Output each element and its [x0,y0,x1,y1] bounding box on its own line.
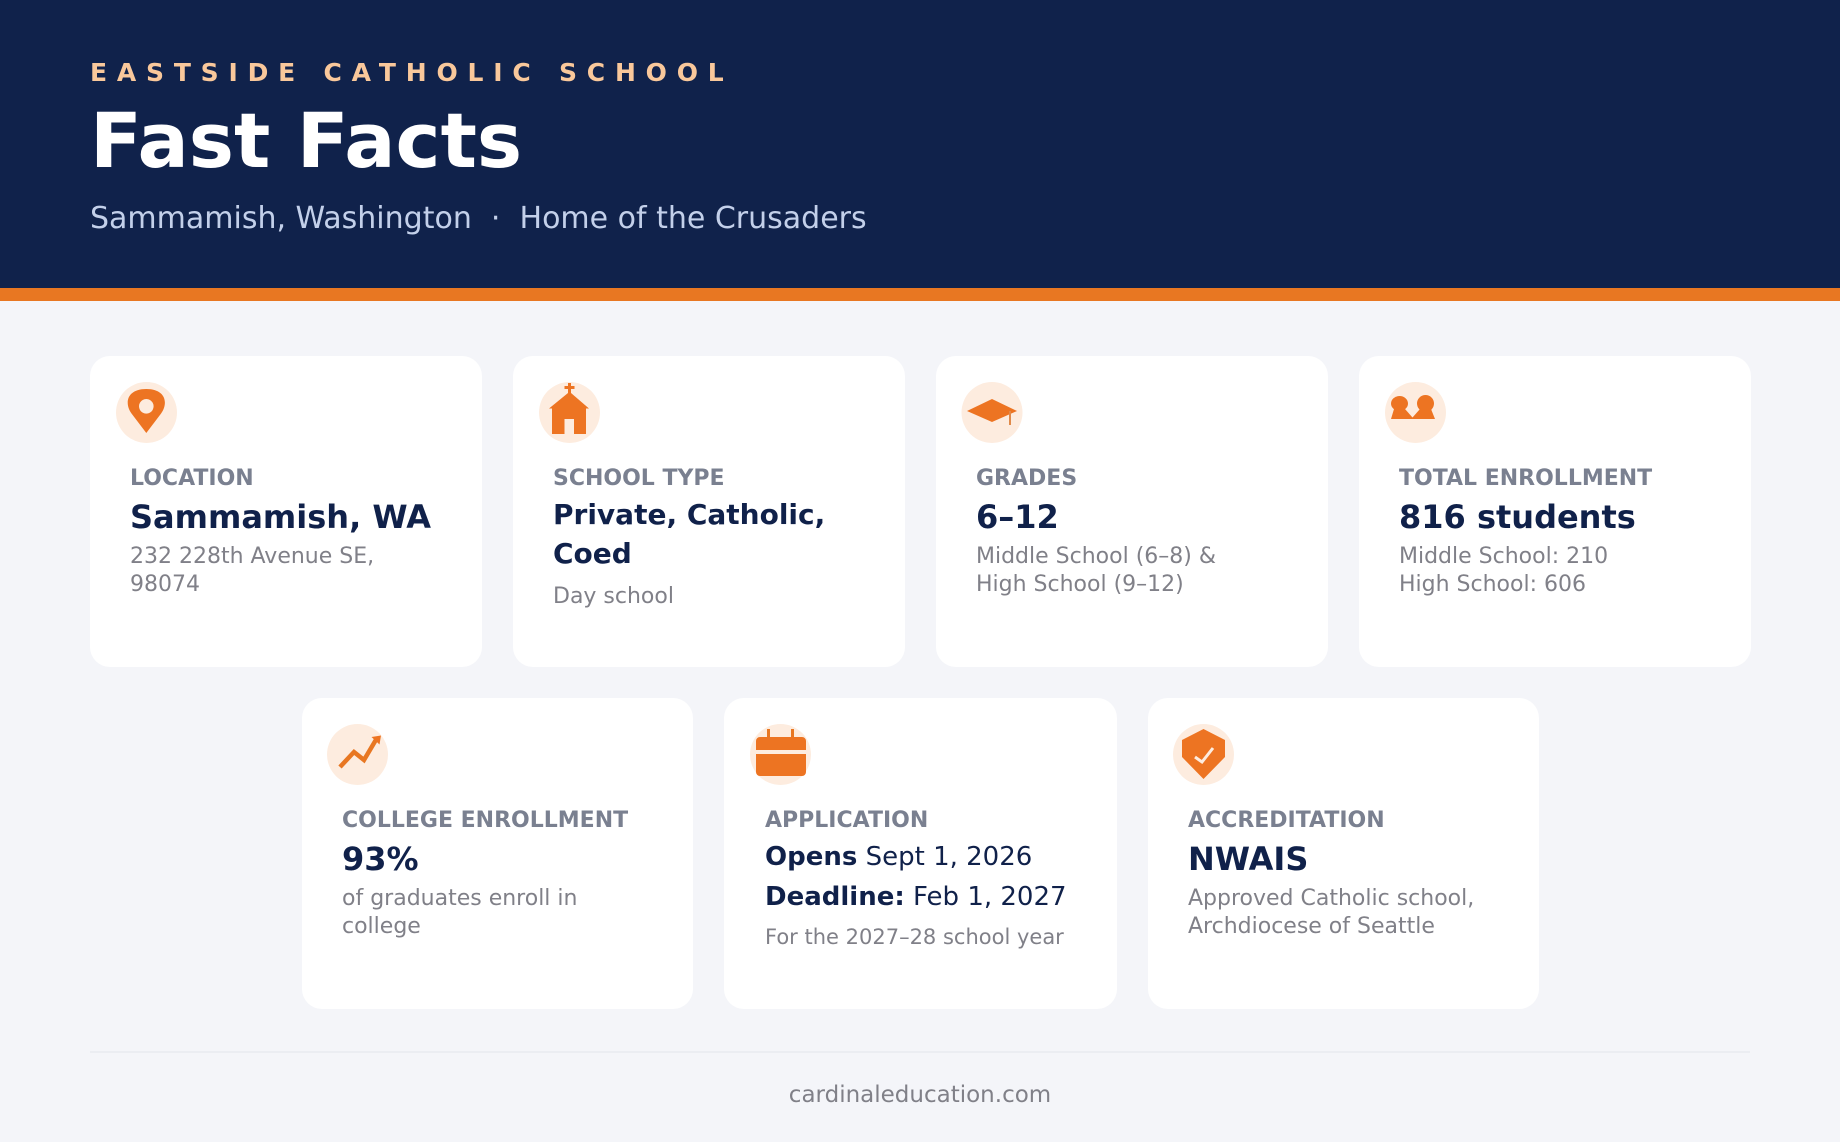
value: NWAIS [1188,840,1308,878]
icon: people [1385,382,1446,443]
icon: calendar [750,724,811,785]
detail: Day school [553,584,674,609]
eyebrow: school name: EASTSIDE CATHOLIC SCHOOL [90,58,734,87]
panel: accreditation [1148,698,1539,1009]
orange accent bar [0,288,1840,301]
label: APPLICATION [765,808,928,833]
label: LOCATION [130,466,254,491]
opens date: Opens Sept 1, 2026 [765,842,1032,872]
subtitle: Sammamish, Washington · Home of the Crusaders [90,201,867,236]
detail: 98074 [130,572,200,597]
panel: total enrollment [1359,356,1751,667]
detail: Middle School: 210 [1399,544,1608,569]
label: GRADES [976,466,1077,491]
title: Fast Facts [90,96,522,185]
icon: rising chart [327,724,388,785]
label: ACCREDITATION [1188,808,1385,833]
icon: shield with check [1173,724,1234,785]
panel: application [724,698,1117,1009]
detail: of graduates enroll in [342,886,577,911]
value: Sammamish, WA [130,498,431,536]
label: SCHOOL TYPE [553,466,725,491]
detail: Archdiocese of Seattle [1188,914,1435,939]
label: COLLEGE ENROLLMENT [342,808,628,833]
icon: graduation cap [962,382,1022,443]
detail: Approved Catholic school, [1188,886,1474,911]
deadline date: Deadline: Feb 1, 2027 [765,882,1067,912]
panel: school type [513,356,905,667]
detail: Middle School (6–8) & [976,544,1216,569]
value: 93% [342,840,419,878]
value: 816 students [1399,498,1636,536]
value: Private, Catholic, [553,498,825,531]
footer url: cardinaleducation.com [789,1082,1051,1108]
detail: college [342,914,421,939]
detail: High School (9–12) [976,572,1184,597]
detail: For the 2027–28 school year [765,925,1064,949]
panel: grades [936,356,1328,667]
icon: church [539,382,600,443]
panel: college enrollment [302,698,693,1009]
detail: 232 228th Avenue SE, [130,544,374,569]
detail: High School: 606 [1399,572,1586,597]
value: Coed [553,537,632,570]
header banner [0,0,1840,288]
label: TOTAL ENROLLMENT [1399,466,1652,491]
panel: location [90,356,482,667]
value: 6–12 [976,498,1059,536]
icon: map pin [116,382,177,443]
